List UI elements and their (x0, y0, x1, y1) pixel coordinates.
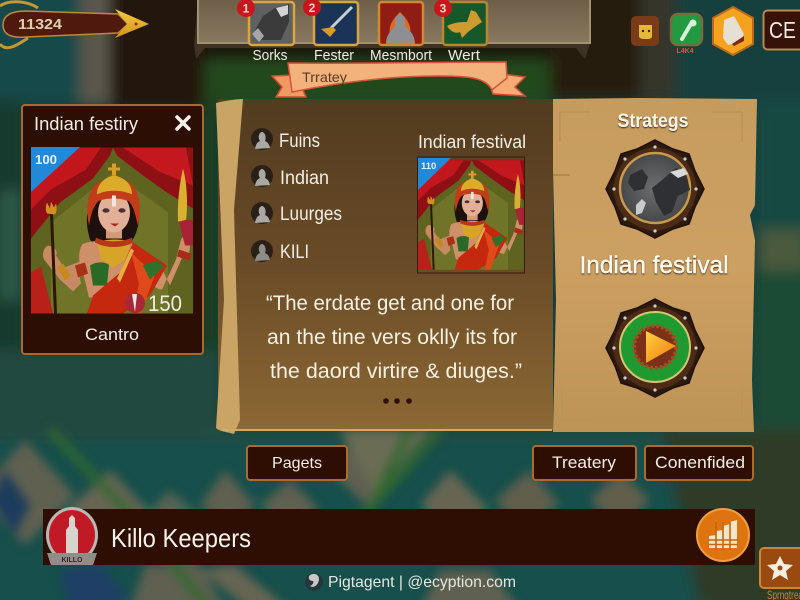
quote (266, 292, 522, 383)
icon: CE button (764, 10, 800, 50)
small portrait (418, 157, 524, 273)
button: Conenfided (645, 446, 753, 480)
card heading: Indian festiry (34, 114, 138, 134)
quote: the daord virtire & diuges.” (270, 360, 522, 383)
top item tray (194, 0, 590, 64)
list item: Fuins: Fuins (279, 131, 320, 152)
panel: character card (22, 105, 203, 354)
list item: KILI: KILI (280, 242, 309, 263)
item: Sorks: 1 (243, 2, 250, 16)
button: Pagets (247, 446, 347, 480)
card caption: Cantro (85, 325, 139, 344)
item: Mesmbort: Mesmbort (370, 48, 432, 64)
ribbon: Trratey: Trratey (302, 69, 347, 85)
top right icons (631, 7, 800, 55)
globe medallion (606, 140, 704, 238)
icon: orange grid button (697, 509, 749, 561)
subheading: Indian festival (418, 132, 526, 152)
icon: green bone: L4K4 (676, 48, 694, 55)
bar title: Killo Keepers (111, 523, 251, 553)
item: Wert: Wert (448, 48, 480, 64)
list item: Indian: Indian (280, 168, 329, 189)
badge emblem (46, 507, 98, 565)
icon: green bone (671, 14, 702, 55)
item: Fester: 2 (309, 1, 316, 15)
icon: close (177, 117, 189, 129)
item: Wert (434, 0, 487, 64)
item: Fester (303, 0, 358, 64)
small portrait: 110 (421, 161, 436, 172)
heading: Strategs: Strategs (618, 111, 688, 132)
item: Mesmbort (370, 2, 432, 64)
bottom bar (43, 507, 755, 565)
panel: central parchment (216, 99, 553, 434)
card portrait: 100 (35, 152, 57, 167)
quote: “The erdate get and one for (266, 292, 514, 315)
card portrait (31, 147, 193, 316)
icon: mask (631, 16, 659, 46)
resource count: 11324 (18, 16, 63, 33)
list of categories (251, 128, 342, 263)
button: Pagets: Pagets (272, 455, 322, 472)
button: Treatery (533, 446, 636, 480)
star button (760, 548, 800, 600)
item: Fester: Fester (314, 48, 354, 64)
quote: an the tine vers oklly its for (267, 326, 517, 349)
list item: Luurges: Luurges (280, 204, 342, 225)
button: Treatery: Treatery (552, 453, 617, 472)
button: Conenfided: Conenfided (655, 453, 745, 472)
badge emblem: KILLO (62, 557, 83, 564)
card portrait: 150 (148, 291, 182, 316)
footer credit: Pigtagent | @ecyption.com (328, 574, 516, 591)
icon: CE button: CE (769, 17, 796, 43)
festival title: Indian festival (580, 252, 728, 279)
top resource banner arrow (0, 2, 149, 48)
panel: strategy page (553, 98, 757, 432)
play medallion (606, 299, 704, 397)
pagination dots (383, 398, 412, 404)
item: Sorks: Sorks (252, 48, 288, 64)
item: Wert: 3 (440, 2, 447, 16)
icon: orange hexagon (713, 7, 753, 55)
item: Sorks (237, 0, 294, 64)
ribbon: Trratey (272, 62, 525, 97)
